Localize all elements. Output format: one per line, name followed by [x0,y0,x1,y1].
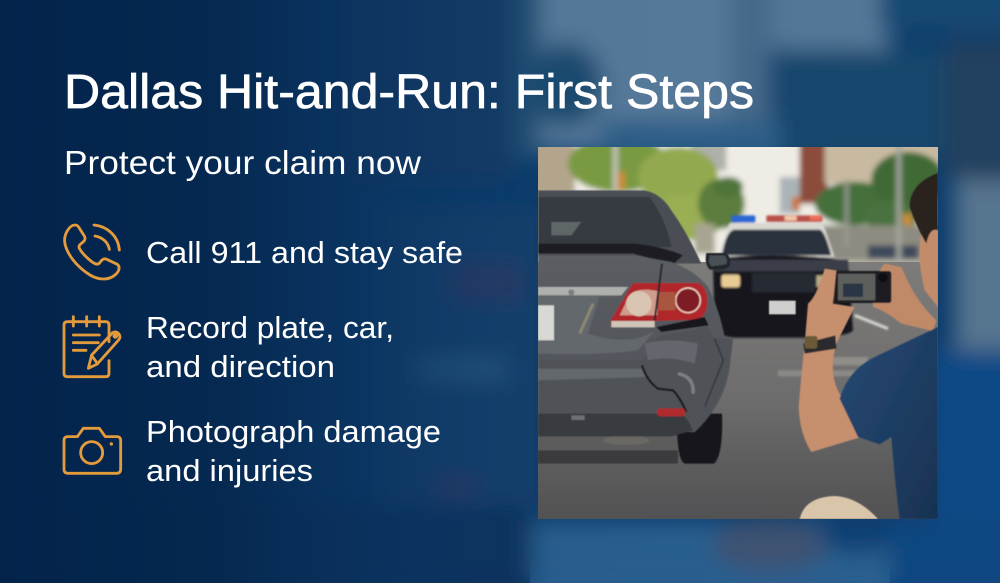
trunk and body [538,256,729,360]
reflector [657,408,685,416]
icon: notepad and pencil [62,315,122,378]
phone [834,271,891,303]
icon: phone [63,224,121,280]
license plate [538,305,554,340]
near hand and forearm [799,269,861,452]
step 2 text: Record plate, car, [146,310,394,345]
watch [803,335,836,354]
dents [642,365,686,412]
tire [677,414,722,464]
road [538,262,938,519]
step 2 text [146,310,394,384]
step 3 text [146,414,441,488]
roof and rear window [538,190,701,264]
subtitle: Protect your claim now [64,144,421,181]
tail light [611,283,707,327]
shirt [840,327,938,519]
head and neck [919,227,938,307]
police plate [769,301,796,314]
pants [800,496,878,519]
road shadow under car [538,434,678,464]
step 1 text: Call 911 and stay safe [146,235,463,270]
step 3 text: Photograph damage [146,414,441,449]
icon: camera [62,426,122,475]
step 3 text: and injuries [146,453,313,488]
broken gap and mirror [656,317,709,332]
title: Dallas Hit-and-Run: First Steps [64,66,754,119]
bumper [685,413,710,432]
far arm and hand [873,264,936,331]
photo: man photographing damaged car and police cruiser [538,147,938,519]
step 2 text: and direction [146,349,335,384]
police car [713,215,853,338]
background street scene [538,147,938,262]
damaged gray car [538,190,733,464]
man with phone [799,173,938,519]
